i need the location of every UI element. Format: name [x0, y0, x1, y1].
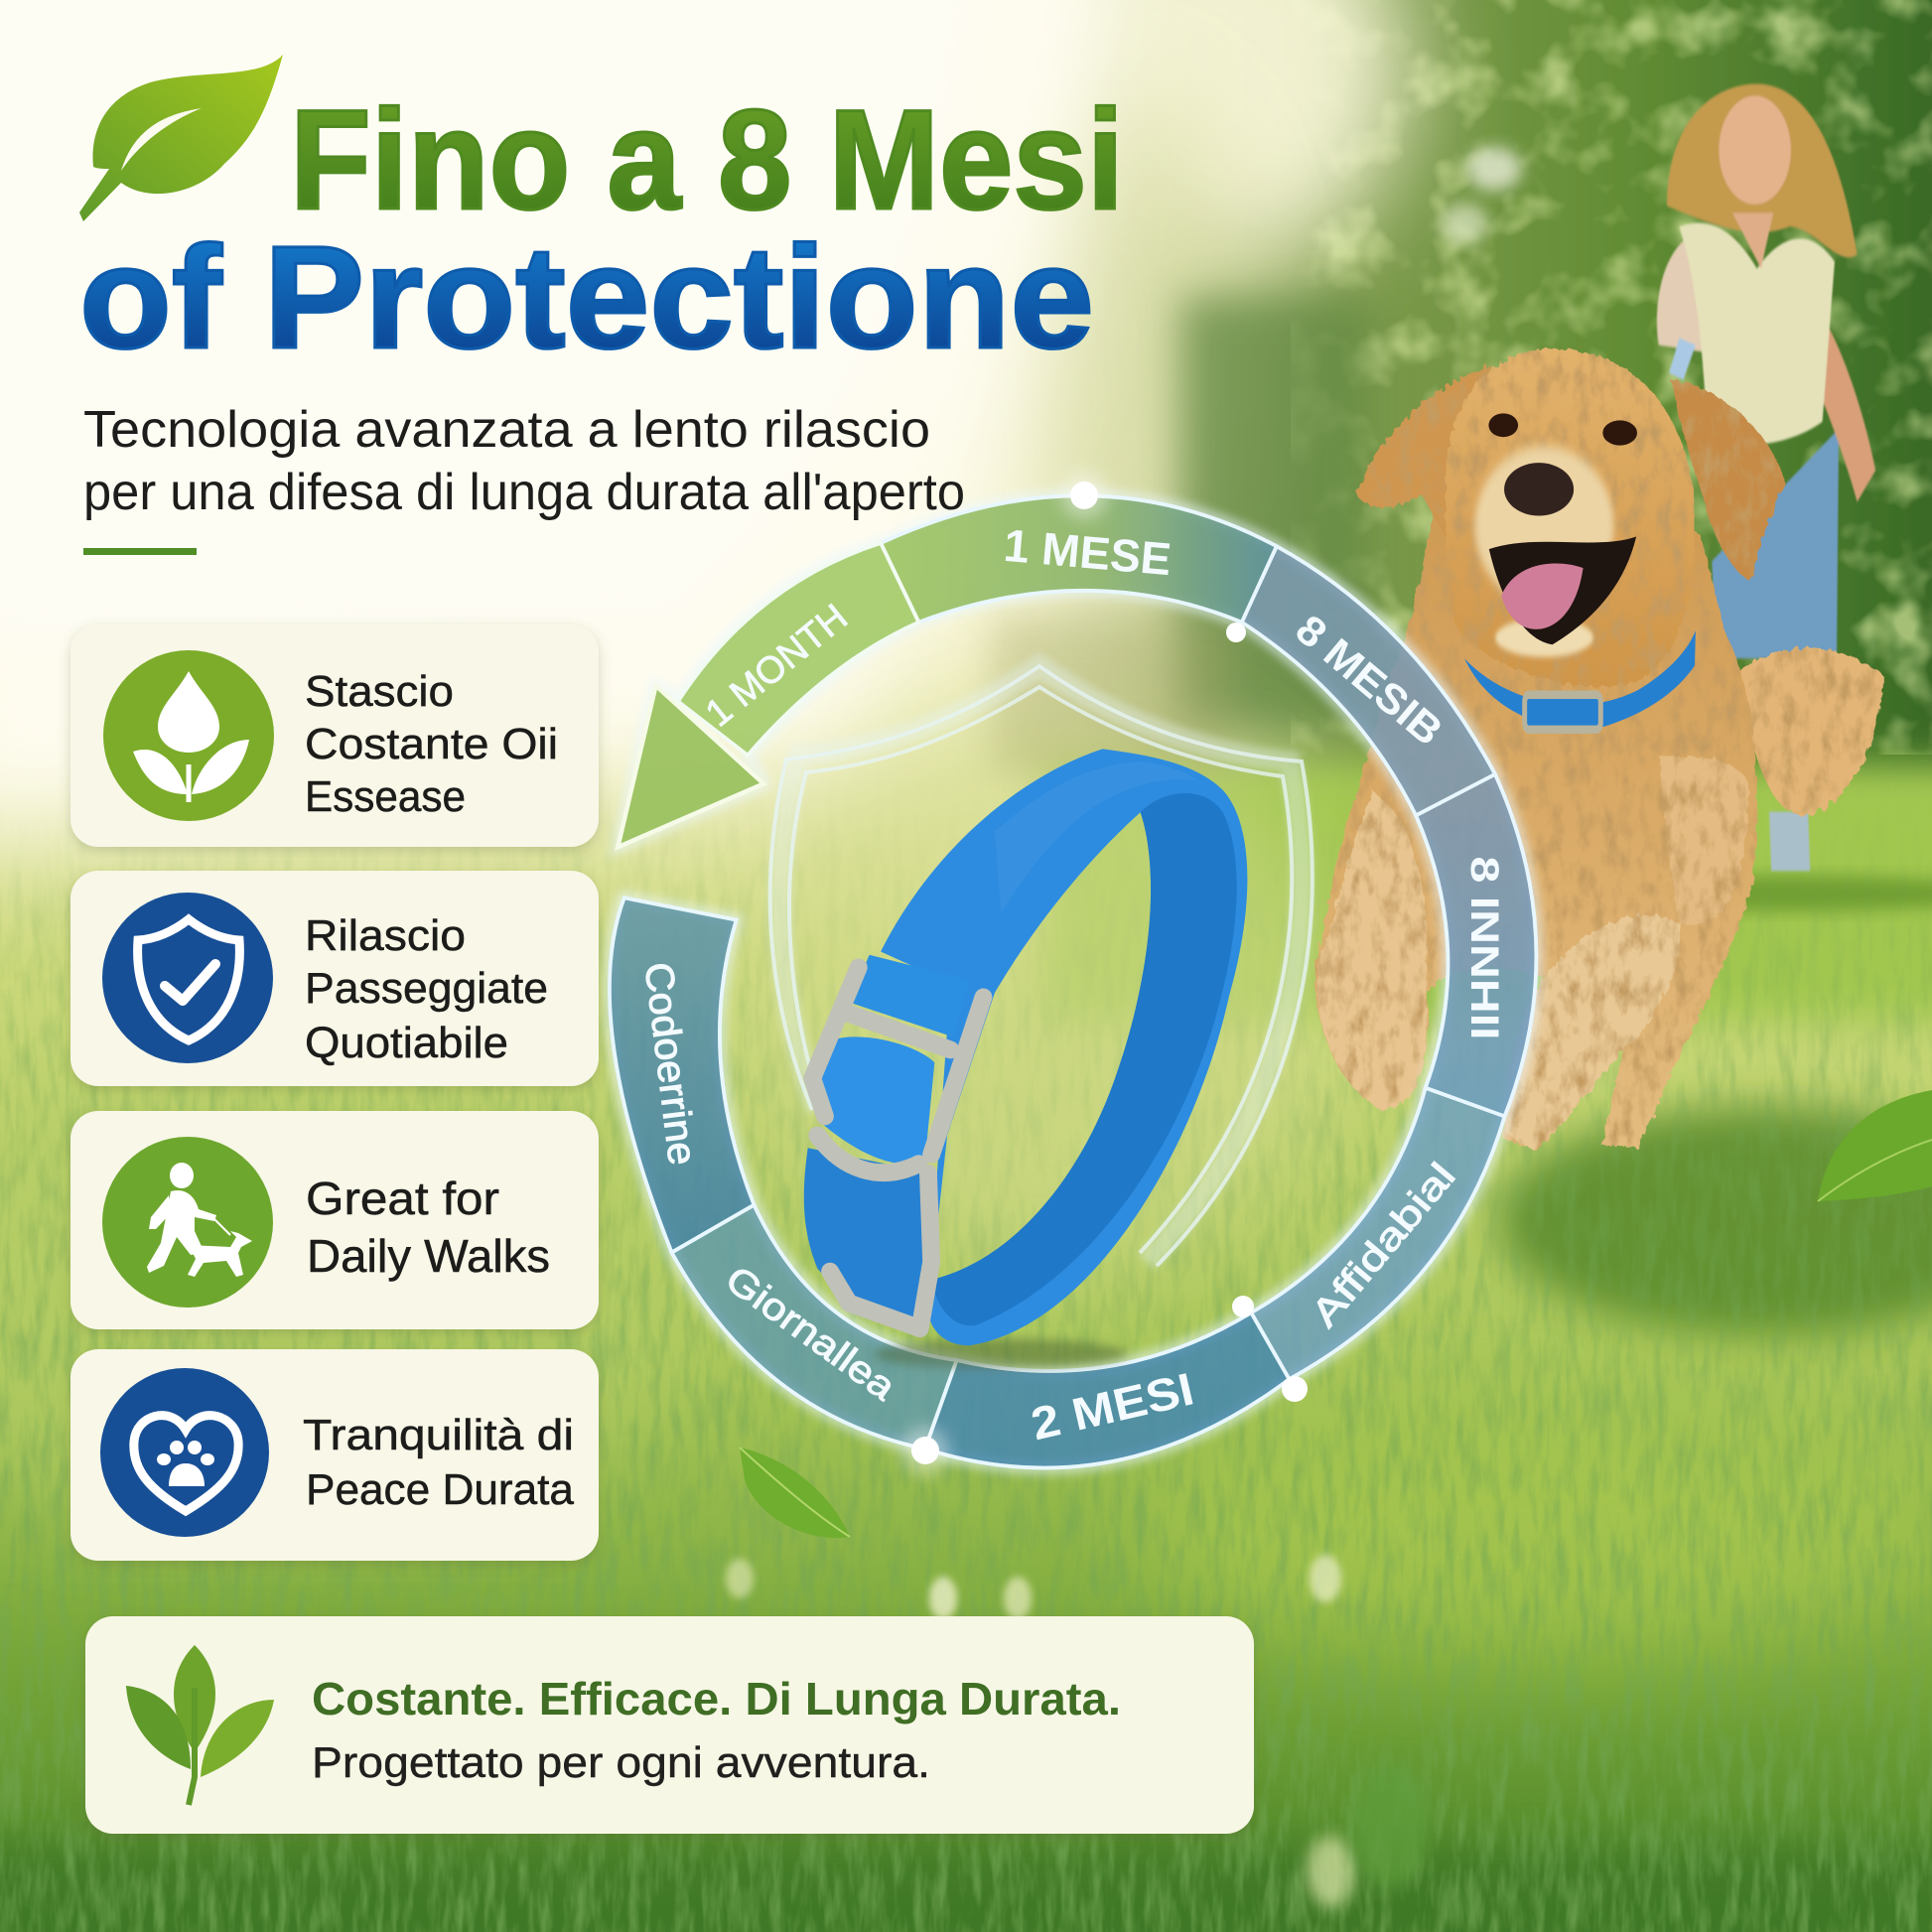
card text: Quotiabile [305, 1019, 508, 1067]
card text: Rilascio [305, 911, 466, 960]
segment: 1 MESE [881, 495, 1277, 622]
segment: 8 INNHII [1416, 774, 1536, 1116]
card text: Tranquilità di [303, 1411, 574, 1459]
woman holding the leash, out of focus [1657, 84, 1875, 871]
wheel labels: 1 MESE [1002, 519, 1173, 585]
arrow head [618, 686, 763, 847]
card text [306, 1173, 550, 1282]
dog body and legs [1314, 491, 1757, 1150]
blue collar product [804, 749, 1247, 1369]
wheel labels [636, 519, 1506, 1449]
icon: shield with check [102, 893, 273, 1063]
title leaf icon [79, 55, 283, 221]
card: Tranquilità di Peace Durata [70, 1349, 599, 1561]
card text [305, 667, 558, 821]
segment: 1 MONTH [678, 543, 918, 756]
card text [303, 1411, 575, 1514]
card: Rilascio Passeggiate Quotiabile [70, 871, 599, 1086]
lower strap [804, 1148, 931, 1325]
icon: heart with paw [100, 1368, 269, 1537]
golden retriever [1314, 348, 1883, 1150]
title: of Protectione [79, 216, 1094, 379]
dog blue collar [1464, 630, 1696, 732]
protective shield outline [770, 666, 1312, 1266]
card: Stascio Costante Oii Essease [70, 624, 599, 847]
decorative leaf, right edge [1818, 1090, 1932, 1201]
wheel glow [610, 495, 1536, 1468]
wheel labels: Giornallea [718, 1259, 903, 1410]
circular timeline wheel [610, 472, 1536, 1474]
subtitle accent bar [83, 548, 197, 555]
card text: Daily Walks [307, 1230, 550, 1282]
banner headline: Costante. Efficace. Di Lunga Durata. [312, 1673, 1121, 1725]
subtitle [83, 401, 965, 521]
card text: Great for [306, 1173, 499, 1224]
title [79, 81, 1124, 379]
wheel labels: Affidabial [1304, 1156, 1463, 1335]
segment: Affidabial [1251, 1088, 1505, 1379]
collar band [881, 749, 1247, 1345]
icon: green plant [126, 1645, 274, 1805]
segment: Codoerrine [610, 897, 755, 1253]
wheel labels: 1 MONTH [698, 597, 856, 735]
dog mouth and tongue [1489, 537, 1636, 644]
card text: Passeggiate [305, 964, 548, 1013]
timeline nodes [901, 472, 1308, 1474]
dog tail [1736, 648, 1883, 816]
card text [305, 911, 548, 1067]
wheel labels: 8 MESIB [1287, 606, 1451, 755]
title: Fino a 8 Mesi [290, 81, 1124, 239]
metal buckle [812, 967, 983, 1328]
keeper loop [849, 955, 969, 1037]
banner tagline: Progettato per ogni avventura. [312, 1738, 930, 1787]
dog head [1356, 348, 1786, 686]
card text: Peace Durata [306, 1465, 575, 1514]
card text: Essease [305, 772, 466, 821]
segment: Giornallea [672, 1205, 957, 1449]
card: Great for Daily Walks [70, 1111, 599, 1329]
subtitle: per una difesa di lunga durata all'aperto [83, 464, 965, 521]
bottom banner [85, 1616, 1254, 1834]
icon: person walking dog [102, 1137, 273, 1308]
wheel labels: 8 INNHII [1462, 856, 1506, 1040]
segment: 8 MESIB [1242, 546, 1495, 815]
decorative leaf, centre bottom [740, 1448, 850, 1538]
subtitle: Tecnologia avanzata a lento rilascio [83, 401, 930, 459]
icon: oil drop and leaves [103, 650, 274, 821]
segment: 2 MESI [925, 1312, 1290, 1468]
card text: Costante Oii [305, 720, 558, 768]
card text: Stascio [305, 667, 454, 716]
wheel labels: Codoerrine [636, 960, 704, 1168]
wheel labels: 2 MESI [1027, 1362, 1198, 1449]
